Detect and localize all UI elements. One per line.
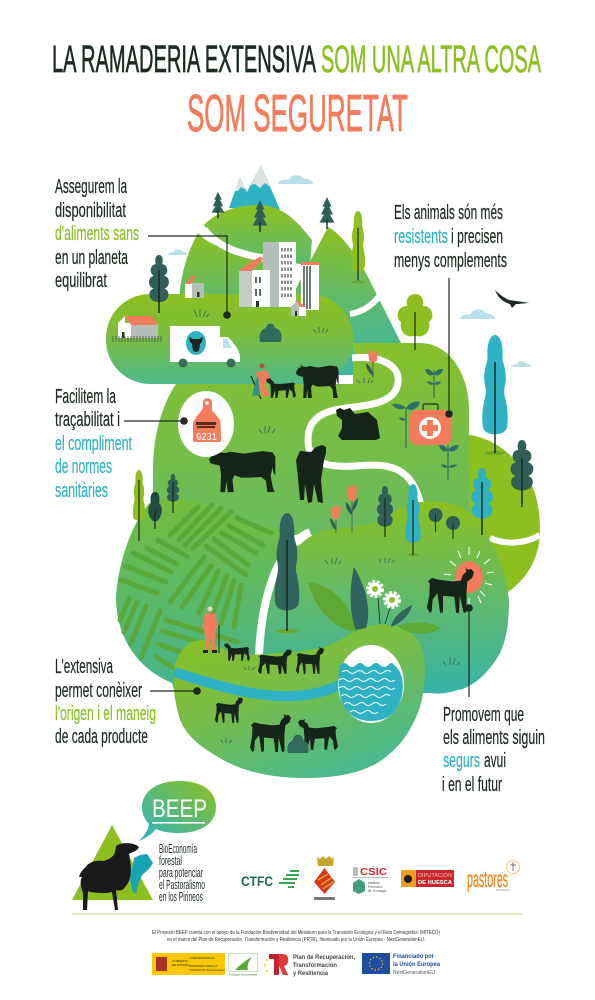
funding statement: en el marco del Plan de Recuperación, Transformación y Resiliencia (PRTR), financiado por la Unión Europea - NextGenerationEU.: [167, 937, 425, 943]
logo: Fundación Biodiversidad: [228, 954, 258, 976]
logo tagline: para potenciar: [159, 866, 203, 880]
shepherd and dog: [251, 364, 296, 399]
road: left of cypress: [259, 532, 310, 655]
flowers and big leaves: [308, 567, 441, 634]
green triangle: [72, 825, 153, 900]
divider: [72, 914, 523, 915]
logo: European Union: NextGenerationEU: [393, 970, 435, 976]
logo tagline: BioEconomía: [159, 842, 197, 856]
logo: pastores: [467, 860, 520, 892]
right back blob: [440, 434, 540, 592]
cow: lying: [336, 408, 380, 440]
callout 5 text: i en el futur: [442, 774, 502, 796]
trees: small round: [428, 508, 460, 539]
logo: CSIC: Pirenaico: [368, 885, 383, 889]
callout 4 text: resistents: [394, 226, 448, 248]
river: [174, 672, 340, 696]
logo: CSIC: CSIC: [360, 866, 387, 878]
title: [52, 39, 541, 143]
callout 1 text: [55, 176, 139, 292]
black sheep: [79, 843, 139, 910]
logo: Gobierno de España: VICEPRESIDENCIA: [189, 956, 215, 960]
goat: by the sun: [427, 547, 494, 613]
callout 2 text: sanitàries: [55, 480, 108, 502]
callout 4 leader line: [445, 278, 453, 418]
callout 3 text: l'origen i el maneig: [55, 703, 156, 725]
callout 4 text: [394, 202, 507, 272]
callout 1 text: Assegurem la: [55, 176, 128, 198]
logo: Gobierno de España: DE ESPAÑA: [172, 962, 189, 967]
speech bubble: [139, 781, 216, 841]
logo: Gobierno de España: MINISTERIO PARA LA: [189, 964, 218, 968]
tree: small dark: [148, 492, 162, 529]
callout 2 text: traçabilitat i: [55, 409, 120, 431]
logo: Fundación Biodiversidad: Fundación Biodiversidad: [229, 972, 257, 976]
bush lower: [287, 735, 309, 753]
logo: CTFC: [241, 871, 299, 889]
logo: Diputación de Huesca: [401, 870, 454, 887]
callout 3 text: permet conèixer: [55, 680, 142, 702]
icon: first-aid case: [410, 404, 451, 445]
icon: daisy: [368, 582, 382, 596]
callout 3 leader line: [150, 687, 201, 695]
logo: Plan de Recuperación: y Resiliencia: [293, 971, 329, 977]
landscape illustration: [106, 165, 540, 778]
logo: pastores: fundación: [496, 888, 511, 892]
callout 5 text: segurs: [443, 750, 480, 772]
delivery truck: [170, 326, 240, 368]
road: middle winding: [308, 358, 421, 505]
callout 2 text: de normes: [55, 456, 112, 478]
logo: Gobierno de España: GOBIERNO: [172, 959, 189, 963]
building: small house on slope: [185, 276, 204, 298]
back left hill: [179, 233, 270, 305]
funding statement: El Proyecto BEEP cuenta con el apoyo de la Fundación Biodiversidad del Ministerio para la Transición Ecológica y el Reto Demográfico (MITECO): [152, 930, 440, 936]
logo tagline: forestal: [159, 854, 182, 868]
logo: Plan de Recuperación: Plan de Recuperación,: [293, 955, 355, 961]
tree: pines on the top hill: [212, 192, 334, 232]
calf: [258, 649, 292, 674]
icon: bird: [495, 290, 530, 308]
logo: CSIC: Instituto: [368, 881, 380, 885]
logo: Diputación de Huesca: DE HUESCA: [418, 880, 452, 886]
goat: lower small: [215, 697, 243, 723]
logo: CSIC: de Ecología: [368, 889, 387, 893]
callout 5 text: [442, 704, 545, 796]
goat: lower right: [298, 719, 338, 750]
building: coral roof block: [239, 257, 270, 307]
BEEP logo: [72, 781, 216, 910]
sprouting plants: [392, 369, 459, 480]
callout 5 text: avui: [484, 750, 506, 772]
tree: dark lobed mid: [377, 486, 393, 537]
callout 4 text: i precisen: [451, 226, 503, 248]
callout 1 text: en un planeta: [55, 247, 129, 269]
tree: teal poplar: [482, 335, 508, 455]
bush: [260, 324, 282, 342]
callout 2 leader line: [124, 417, 188, 425]
logo: Gobierno de España: TRANSICIÓN ECOLÓGICA: [189, 967, 224, 972]
teal sheep: [130, 854, 153, 894]
logo tagline: [159, 842, 205, 904]
cow: upper right: [296, 364, 339, 398]
logo: European Union: Financiado por: [393, 954, 435, 960]
logo: Plan de Recuperación: Transformación: [293, 963, 337, 969]
icon: daisy: [386, 594, 398, 606]
callout 4 text: Els animals són més: [394, 202, 503, 224]
clouds: [168, 175, 531, 367]
callout 2 text: [55, 386, 132, 502]
upper blob: [106, 294, 353, 384]
callout 5 leader line: [465, 604, 473, 697]
field stripes: [120, 505, 271, 668]
top hill: [204, 205, 312, 265]
callout 1 text: disponibilitat: [55, 200, 126, 222]
logo: CSIC: [353, 866, 388, 894]
buildings: [113, 242, 319, 342]
callout 1 text: d'aliments sans: [55, 223, 139, 245]
lower front blob: [174, 624, 425, 778]
icon: ear tag: 9231: [196, 432, 217, 443]
road: top: [204, 229, 264, 258]
cows: [209, 364, 494, 752]
road: right hill: [350, 295, 380, 314]
tree: small lobed: [167, 474, 179, 513]
middle right blob: [263, 502, 509, 694]
tree: big cypress: [275, 513, 299, 633]
logo: Diputación de Huesca: DIPUTACIÓN: [418, 872, 452, 879]
mountains: [229, 165, 280, 210]
building: tall tower: [263, 242, 296, 307]
callout 4 text: menys complements: [394, 250, 507, 272]
dog: [224, 643, 250, 661]
back right hill: [290, 227, 401, 375]
second blob: [153, 343, 469, 535]
cow: large left: [209, 450, 275, 492]
logo: pastores: pastores: [467, 866, 508, 892]
icon: cow head: [189, 337, 203, 352]
goat: lower middle: [250, 714, 291, 752]
tufts of grass: [194, 309, 460, 743]
logo: coat of arms: [314, 856, 335, 900]
funding statement: [152, 930, 440, 943]
tree: lime poplar top: [351, 211, 365, 284]
tree: teal poplar mid: [405, 484, 421, 556]
tree: dark lobed right: [511, 440, 533, 507]
tulips: [330, 349, 378, 533]
callout 1 text: equilibrat: [55, 270, 107, 292]
building: small house front: [291, 300, 306, 316]
building: slim tower: [301, 262, 319, 310]
logo wordmark: BEEP: [152, 795, 207, 823]
worker in orange: [202, 606, 219, 653]
logo: Gobierno de España: [152, 953, 225, 975]
title: LA RAMADERIA EXTENSIVA: [52, 39, 316, 81]
callout 3 text: [55, 656, 156, 748]
tree: teal lobed: [471, 468, 493, 535]
cow: standing front: [296, 445, 326, 503]
water pond: [338, 645, 404, 723]
logo: European Union: la Unión Europea: [393, 962, 441, 968]
left field: [116, 498, 300, 690]
callout 2 text: el compliment: [55, 433, 132, 455]
tree: dark lobed left: [149, 255, 169, 313]
logo tagline: el Pastoralismo: [159, 878, 205, 892]
tree: lime poplar left: [133, 470, 145, 541]
building: farm: [113, 316, 161, 342]
callout 5 text: Promovem que: [443, 704, 524, 726]
logo tagline: en los Pirineos: [159, 890, 203, 904]
callout 2 text: Facilitem la: [55, 386, 117, 408]
logo: Plan de Recuperación: [264, 954, 355, 977]
icon: ear tag: [178, 391, 234, 457]
calf right: [296, 647, 324, 674]
callout 1 leader line: [148, 236, 231, 319]
trees: [133, 192, 533, 633]
road: right: [490, 535, 540, 543]
tree: round lime: [398, 294, 432, 350]
logo: CTFC: CTFC: [241, 873, 273, 889]
callout 3 text: de cada producte: [55, 726, 148, 748]
callout 3 text: L'extensiva: [55, 656, 114, 678]
logo: European Union: [362, 953, 441, 976]
